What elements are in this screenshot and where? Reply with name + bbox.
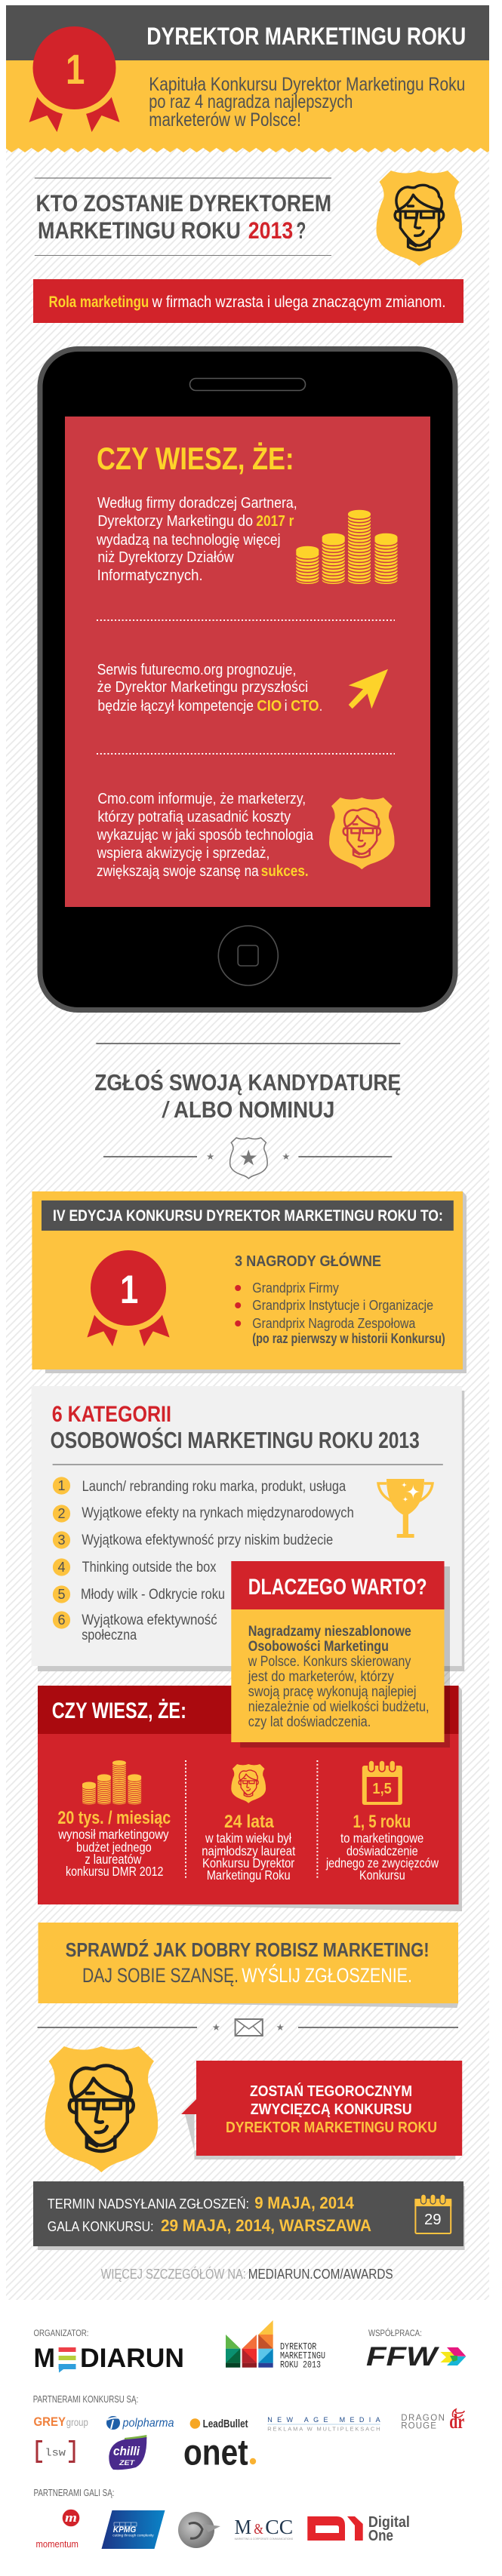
prize list	[235, 1252, 445, 1346]
more details link: MEDIARUN.COM/AWARDS	[248, 2267, 393, 2282]
header subtitle: po raz 4 nagradza najlepszych	[149, 91, 353, 112]
panel: dates: 29 MAJA, 2014, WARSZAWA	[161, 2216, 371, 2235]
logo: momentum	[36, 2510, 79, 2550]
label: partnerami konkursu: PARTNERAMI KONKURSU SĄ:	[33, 2394, 138, 2405]
logo: mediarun: DIARUN	[80, 2344, 184, 2373]
logo: lsw: lsw	[45, 2447, 66, 2459]
logo: grey group: GREY	[33, 2415, 66, 2429]
logo: digital one: One	[368, 2528, 393, 2544]
label: organizator: ORGANIZATOR:	[33, 2328, 89, 2338]
category list: 3	[57, 1532, 66, 1548]
logo: dragon rouge: DRAGON	[401, 2414, 445, 2423]
stat: experience: Konkursu	[359, 1867, 405, 1883]
phone home button	[218, 926, 278, 985]
panel heading bar	[42, 1200, 454, 1231]
logo: m&cc: &	[254, 2521, 263, 2538]
phone	[40, 349, 455, 1010]
logo: dyrektor marketingu roku 2013: MARKETINGU	[280, 2351, 325, 2362]
fact: cmo.com: którzy potrafią uzasadnić koszty	[97, 808, 291, 825]
prize list: 3 NAGRODY GŁÓWNE	[235, 1252, 381, 1270]
fact: gartner: Informatycznych.	[97, 567, 203, 584]
panel: iv edycja	[32, 1191, 467, 1373]
logo: m&cc: M	[235, 2516, 251, 2538]
panel text: Nagradzamy nieszablonowe	[248, 1624, 411, 1640]
panel: 6 kategorii	[32, 1386, 464, 1671]
logo: ffw	[366, 2342, 466, 2372]
header banner	[6, 5, 489, 152]
fact: cmo.com: Cmo.com informuje, że marketerzy,	[97, 790, 306, 807]
stat: budget: 20 tys. / miesiąc	[57, 1808, 171, 1828]
heading: kto zostanie dyrektorem: KTO ZOSTANIE DYREKTOREM	[36, 189, 331, 217]
logo: onet: onet	[183, 2433, 248, 2473]
fact: cmo.com: wspiera akwizycję i sprzedaż,	[97, 844, 269, 862]
category list: Wyjątkowa efektywność przy niskim budżecie	[82, 1532, 333, 1548]
heading: kto zostanie dyrektorem: 2013	[248, 217, 293, 244]
logo: kpmg: KPMG	[113, 2525, 137, 2535]
logo: ffw: FFW	[366, 2342, 440, 2372]
icon: coins	[82, 1760, 141, 1804]
fact: cmo.com: zwiększają swoje szansę na	[97, 862, 259, 880]
icon: calendar 29	[414, 2194, 451, 2233]
stat: budget: konkursu DMR 2012	[66, 1864, 163, 1879]
more details link: WIĘCEJ SZCZEGÓŁÓW NA:	[101, 2266, 246, 2282]
stat: budget: wynosił marketingowy	[57, 1827, 169, 1842]
stat: age	[202, 1764, 295, 1883]
callout: zostań zwycięzcą	[181, 2061, 462, 2159]
logo: chilli zet: chilli	[113, 2444, 140, 2458]
category list: 4	[57, 1560, 66, 1575]
category list: 2	[57, 1506, 66, 1521]
logo: momentum: m	[65, 2510, 77, 2525]
stat: budget	[57, 1760, 171, 1879]
icon: calendar 29: 29	[424, 2212, 442, 2228]
phone screen	[65, 417, 430, 907]
logo: chilli zet	[109, 2435, 146, 2470]
callout: zostań zwycięzcą: DYREKTOR MARKETINGU ROKU	[226, 2120, 437, 2136]
label: partnerami gali: PARTNERAMI GALI SĄ:	[33, 2488, 115, 2498]
divider: envelope	[38, 2019, 458, 2036]
category list: Thinking outside the box	[82, 1560, 217, 1575]
fact: gartner	[96, 494, 297, 584]
heading: zgłoś swoją kandydaturę: /	[162, 1097, 171, 1123]
fact: futurecmo: i	[285, 697, 288, 715]
callout: zostań zwycięzcą: ZWYCIĘZCĄ KONKURSU	[251, 2101, 412, 2118]
fact: futurecmo: będzie łączył kompetencje	[97, 697, 254, 715]
divider: badge with star	[103, 1138, 392, 1179]
stats heading band	[38, 1686, 459, 1734]
logo: dragon rouge	[401, 2409, 464, 2433]
panel: call to action: SPRAWDŹ JAK DOBRY ROBISZ MARKETING!	[66, 1938, 430, 1961]
icon: medal	[87, 1250, 170, 1346]
heading: kto zostanie dyrektorem: ?	[296, 217, 306, 244]
fact: gartner: Dyrektorzy Marketingu do	[97, 512, 253, 530]
category list	[53, 1477, 354, 1643]
logo: dragon rouge: dr	[449, 2410, 464, 2433]
icon: calendar 1,5: 1,5	[372, 1781, 392, 1797]
banner: rola marketingu: w firmach wzrasta i ulega znaczącym zmianom.	[152, 294, 445, 311]
screen heading: CZY WIESZ, ŻE:	[97, 441, 294, 476]
icon: small badge	[329, 798, 395, 869]
category list: Młody wilk - Odkrycie roku	[81, 1587, 225, 1603]
panel text: czy lat doświadczenia.	[248, 1714, 371, 1730]
panel heading: 6 KATEGORII	[52, 1402, 171, 1427]
banner: rola marketingu	[33, 279, 464, 323]
logo: kpmg: cutting through complexity	[112, 2534, 154, 2538]
header subtitle	[149, 74, 465, 131]
stat: experience	[325, 1760, 439, 1883]
panel heading: OSOBOWOŚCI MARKETINGU ROKU 2013	[51, 1426, 420, 1453]
stat: age: Konkursu Dyrektor	[202, 1855, 294, 1871]
category list: Wyjątkowe efekty na rynkach międzynarodowych	[82, 1505, 354, 1521]
heading: zgłoś swoją kandydaturę: ALBO NOMINUJ	[174, 1097, 334, 1123]
category list: Wyjątkowa efektywność	[82, 1612, 217, 1628]
panel text	[248, 1624, 429, 1730]
icon: calendar 1,5	[362, 1760, 402, 1805]
prize list: Grandprix Instytucje i Organizacje	[252, 1297, 433, 1313]
logo: leadbullet	[190, 2418, 248, 2430]
logo: polpharma	[106, 2416, 174, 2430]
icon: marketer badge	[376, 171, 462, 266]
prize list: (po raz pierwszy w historii Konkursu)	[252, 1330, 445, 1346]
panel: call to action	[38, 1923, 458, 2008]
logo: new age media	[267, 2416, 380, 2433]
logo: digital one: Digital	[368, 2514, 410, 2531]
logo: chilli zet: ZET	[119, 2459, 136, 2467]
panel: call to action: DAJ SOBIE SZANSĘ.	[82, 1964, 239, 1987]
label: współpraca: WSPÓŁPRACA:	[368, 2327, 422, 2338]
category list: 5	[57, 1587, 66, 1602]
panel: dates: 9 MAJA, 2014	[254, 2193, 355, 2212]
category list: 6	[57, 1612, 66, 1628]
fact: futurecmo: .	[319, 697, 322, 715]
logo: new age media: REKLAMA W MULTIPLEKSACH	[267, 2425, 380, 2433]
panel: czy wiesz stats	[38, 1686, 462, 1911]
logo: dyrektor marketingu roku 2013: DYREKTOR	[280, 2341, 317, 2352]
stat: age: Marketingu Roku	[207, 1867, 291, 1883]
logo: kpmg	[101, 2510, 165, 2549]
logo: m&cc: CC	[265, 2516, 293, 2538]
fact: futurecmo: Serwis futurecmo.org prognozuje,	[97, 661, 296, 678]
panel text: Osobowości Marketingu	[248, 1639, 389, 1655]
heading: kto zostanie dyrektorem: MARKETINGU ROKU	[38, 217, 241, 244]
prize list: Grandprix Firmy	[252, 1280, 340, 1296]
icon: trophy	[378, 1479, 433, 1538]
logo: new age media: NEW AGE MEDIA	[267, 2416, 380, 2424]
panel text: w Polsce. Konkurs skierowany	[248, 1654, 411, 1670]
panel: dates	[33, 2181, 465, 2250]
fact: futurecmo: że Dyrektor Marketingu przyszłości	[97, 678, 308, 696]
logo: dyrektor marketingu roku 2013: ROKU 2013	[280, 2360, 321, 2371]
banner: rola marketingu: Rola marketingu	[48, 294, 149, 311]
icon: medal: 1	[66, 45, 85, 93]
callout: zostań zwycięzcą: ZOSTAŃ TEGOROCZNYM	[250, 2083, 412, 2100]
panel text: swoją pracę wykonują najlepiej	[248, 1684, 417, 1700]
logo: mediarun	[33, 2344, 184, 2373]
header subtitle: marketerów w Polsce!	[149, 109, 301, 131]
fact: gartner: wydadzą na technologię więcej	[96, 531, 280, 549]
logo: polpharma: polpharma	[122, 2417, 174, 2430]
category list: 1	[57, 1478, 66, 1493]
logo: grey group: group	[66, 2416, 88, 2428]
icon: arrow	[349, 669, 388, 709]
stat: age: najmłodszy laureat	[202, 1843, 295, 1858]
logo: mediarun: M	[33, 2344, 55, 2373]
icon: large badge	[45, 2046, 158, 2172]
stat: experience: to marketingowe	[340, 1831, 423, 1846]
fact: gartner: Według firmy doradczej Gartnera,	[97, 494, 297, 512]
fact: futurecmo: CTO	[291, 697, 319, 715]
stat: experience: jednego ze zwycięzców	[325, 1855, 439, 1871]
logo: digital one	[307, 2514, 410, 2544]
more details link	[101, 2266, 393, 2282]
stat: age: w takim wieku był	[205, 1831, 291, 1846]
fact: cmo.com: wykazując w jaki sposób technologia	[97, 826, 314, 844]
panel: dlaczego warto	[231, 1561, 450, 1748]
panel: call to action: WYŚLIJ ZGŁOSZENIE.	[242, 1963, 412, 1987]
fact: futurecmo	[97, 661, 322, 715]
fact: cmo.com	[97, 790, 314, 880]
panel text: jest do marketerów, którzy	[248, 1669, 394, 1685]
logo: dragon globe	[178, 2512, 220, 2548]
logo: m&cc: MARKETING & CORPORATE COMMUNICATIONS	[235, 2538, 294, 2541]
icon: medal: 1	[120, 1268, 138, 1312]
logo: grey group	[33, 2415, 88, 2429]
logo: m&cc	[235, 2516, 294, 2541]
icon: badge	[231, 1764, 266, 1803]
stat: experience: 1, 5 roku	[353, 1812, 411, 1832]
heading: zgłoś swoją kandydaturę	[94, 1068, 401, 1123]
logo: lsw	[37, 2442, 74, 2461]
panel heading: DLACZEGO WARTO?	[248, 1575, 427, 1600]
logo: leadbullet: LeadBullet	[203, 2418, 248, 2430]
phone speaker	[190, 379, 305, 391]
fact: cmo.com: sukces.	[261, 862, 309, 880]
fact: gartner: 2017 r	[256, 512, 294, 530]
heading: kto zostanie dyrektorem	[35, 178, 331, 256]
prize list: Grandprix Nagroda Zespołowa	[252, 1315, 416, 1331]
heading: zgłoś swoją kandydaturę: ZGŁOŚ SWOJĄ KANDYDATURĘ	[94, 1068, 401, 1096]
category list: społeczna	[82, 1628, 137, 1643]
stat: budget: budżet jednego	[76, 1840, 152, 1855]
panel: dates: TERMIN NADSYŁANIA ZGŁOSZEŃ:	[48, 2196, 249, 2212]
fact: futurecmo: CIO	[257, 697, 282, 715]
icon: medal	[29, 26, 119, 132]
stat: age: 24 lata	[224, 1812, 274, 1832]
panel: dates: GALA KONKURSU:	[48, 2218, 154, 2234]
logo: dyrektor marketingu roku 2013	[226, 2320, 325, 2371]
stat: experience: doświadczenie	[346, 1843, 418, 1858]
icon: coin stacks	[296, 510, 397, 584]
logo: dragon rouge: ROUGE	[401, 2422, 436, 2431]
panel heading	[51, 1402, 420, 1453]
category list: Launch/ rebranding roku marka, produkt, usługa	[82, 1479, 346, 1495]
fact: gartner: niż Dyrektorzy Działów	[97, 549, 234, 566]
stat: budget: z laureatów	[85, 1852, 142, 1867]
panel text: niezależnie od wielkości budżetu,	[248, 1699, 429, 1715]
logo: momentum: momentum	[36, 2539, 79, 2550]
stats heading band: CZY WIESZ, ŻE:	[52, 1698, 186, 1723]
